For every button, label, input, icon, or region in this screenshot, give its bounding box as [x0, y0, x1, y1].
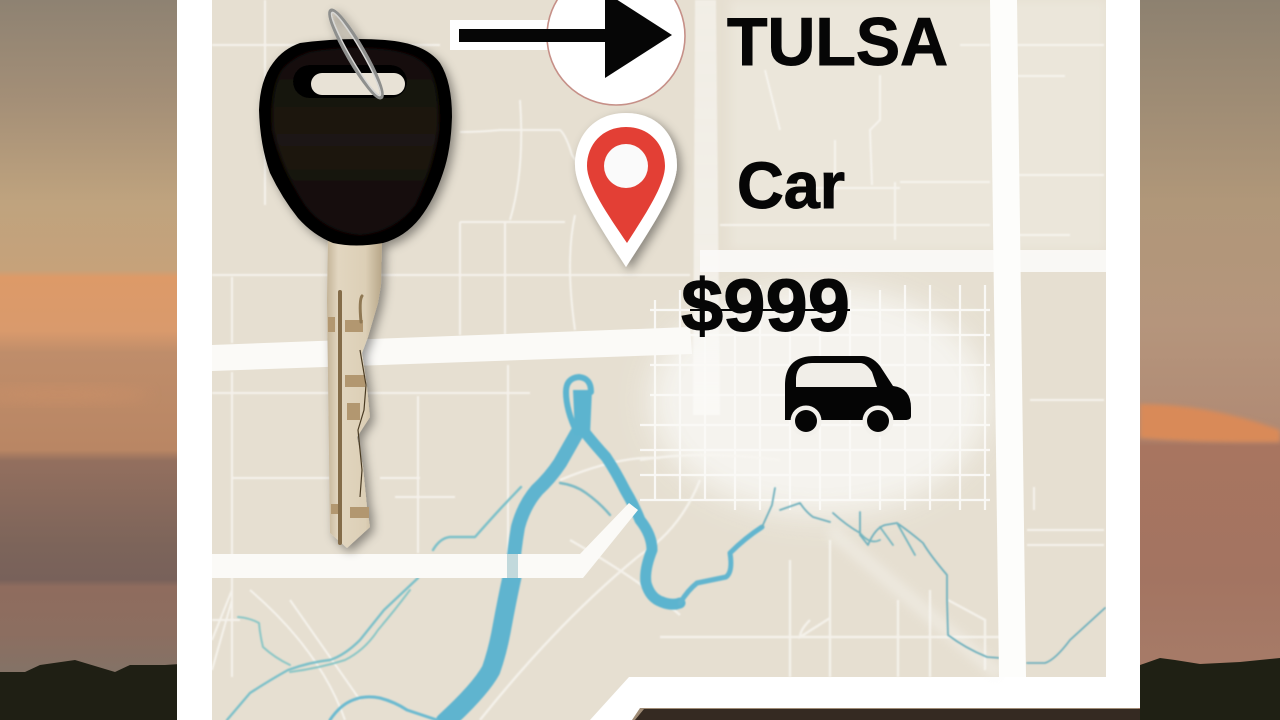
downtown grid: [640, 285, 990, 510]
pin centre: [604, 144, 648, 188]
city glow: [650, 285, 990, 515]
key blade: [327, 240, 382, 548]
blade groove: [338, 292, 342, 543]
outer arterial roads: [480, 455, 1000, 720]
arrow white backing: [450, 20, 560, 50]
wide white road: west-east lower with diagonal: [212, 503, 638, 578]
thin west tributary: [227, 487, 521, 720]
wide white road: north-south east: [990, 0, 1026, 677]
arrow: [450, 0, 685, 105]
background: sunset sky right: [1138, 0, 1280, 720]
price: $999 struck through: $999: [681, 264, 850, 347]
thin street network: [212, 0, 1104, 720]
wide white road: north-south centre: [694, 0, 719, 350]
main river middle: [512, 433, 577, 577]
background: tree line right: [1140, 658, 1280, 720]
circle behind arrow: [547, 0, 685, 105]
blade right groove: [360, 296, 362, 322]
rivers: [227, 377, 1105, 720]
dark photo strip under frame: [635, 709, 1140, 720]
main river reach to east: [680, 527, 762, 603]
wide white road: west-east upper: [212, 327, 692, 371]
key fob inner sheen: [272, 48, 438, 235]
map panel: [212, 0, 1106, 720]
white map frame: [177, 0, 1140, 720]
background: tree line left: [0, 660, 180, 720]
car body: [785, 356, 911, 420]
icon: car: [785, 356, 911, 436]
icon: location pin: [575, 113, 677, 267]
upper right land tone: [730, 0, 1106, 250]
car window: [796, 363, 877, 387]
heading: TULSA: TULSA: [727, 4, 948, 80]
main river east fork: [583, 430, 680, 604]
car wheel front: [862, 406, 894, 436]
reservoir block: [573, 390, 592, 435]
pin body: [587, 127, 665, 243]
river crossing lower road: [507, 554, 518, 578]
key fob: [259, 39, 452, 246]
blade patches: [328, 317, 369, 518]
label: Car: Car: [737, 148, 845, 222]
pin outline: [575, 113, 677, 267]
key slot opening: [311, 73, 405, 95]
key slot: [293, 65, 407, 98]
faint wide diagonal road: [830, 530, 1000, 675]
main river lower: [445, 577, 512, 720]
arrow head: [605, 0, 672, 78]
blade cut line: [358, 350, 366, 497]
east creek: [762, 488, 1105, 663]
key ring: [324, 7, 388, 101]
background: sunset sky left: [0, 0, 180, 720]
wide white road: east upper: [700, 250, 1106, 272]
icon: car key: [259, 7, 452, 548]
car wheel rear: [790, 406, 822, 436]
river top loop: [566, 377, 591, 433]
arrow shaft: [459, 29, 609, 42]
map land: [212, 0, 1106, 720]
